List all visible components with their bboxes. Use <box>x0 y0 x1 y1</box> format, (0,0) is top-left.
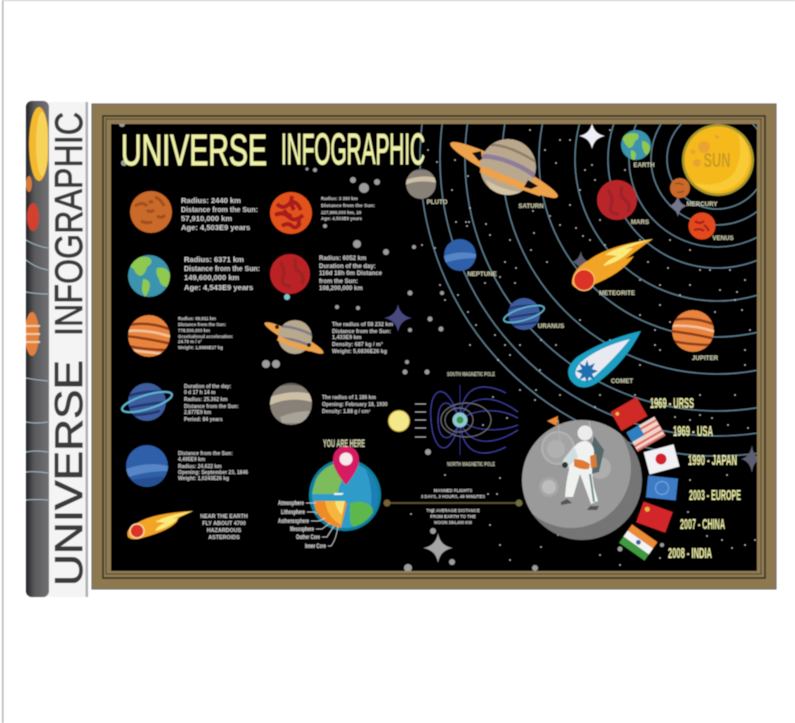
distance connector <box>384 500 522 506</box>
text: manned flights: MOON 384,400 KM <box>434 520 472 525</box>
flag: ussr <box>611 397 647 431</box>
earth layer labels: Inner Core <box>305 544 326 550</box>
text: uranus facts: 0 d 17 h 14 m <box>184 390 216 396</box>
sun <box>682 124 754 196</box>
timeline labels: 1969 - URSS <box>650 395 694 412</box>
text: uranus facts: Period: 84 years <box>184 417 223 423</box>
orbit planet labels: METEORITE <box>599 290 635 297</box>
earth layer labels: Mesosphere <box>290 527 314 533</box>
sun and magnetosphere <box>388 385 518 455</box>
orbit planet labels: JUPITER <box>692 355 719 362</box>
orbit planet: mercury <box>670 178 690 198</box>
text: uranus facts: 2,877E9 km <box>184 410 212 416</box>
earth layer labels: Asthenosphere <box>278 519 309 525</box>
orbit planet labels: MARS <box>631 219 649 226</box>
text: manned flights: FROM EARTH TO THE <box>430 514 476 519</box>
moon <box>521 419 643 541</box>
location pin <box>333 446 359 485</box>
text: saturn facts: Distance from the Sun: <box>332 329 391 335</box>
text: asteroids note: ASTEROIDS <box>208 535 240 541</box>
text: venus facts <box>319 256 383 292</box>
orbits <box>418 123 758 458</box>
planet: neptune <box>126 445 168 487</box>
earth cutaway <box>309 459 381 536</box>
text: asteroids note: NEAR THE EARTH <box>200 514 248 520</box>
text: saturn facts <box>332 322 393 355</box>
title <box>122 132 426 167</box>
text: mercury facts: Radius: 2440 km <box>181 196 241 205</box>
text: neptune facts: Opening: September 23, 1846 <box>178 470 248 476</box>
text: earth facts: 149,600,000 km <box>184 273 240 282</box>
text: mars facts: Age: 4,503E9 years <box>321 216 363 221</box>
text: jupiter facts: Weight: 1,8986E27 kg <box>178 345 223 350</box>
flag: india <box>619 524 657 561</box>
text: venus facts: 108,200,000 km <box>319 286 363 292</box>
planet: pluto <box>270 381 312 425</box>
text: venus facts: 116d 18h 0m Distance <box>319 271 383 277</box>
planet: mercury <box>130 191 172 233</box>
poster content: INFOGRAPHIC <box>281 125 425 174</box>
text: saturn facts: Weight: 5,6836E26 kg <box>332 349 387 355</box>
sun: SUN <box>704 150 730 172</box>
text: earth facts <box>184 255 260 292</box>
poster tube: UNIVERSE <box>48 360 91 586</box>
text: uranus facts: Radius: 25,362 km <box>184 397 228 403</box>
poster tube: INFOGRAPHIC <box>48 112 91 336</box>
text: asteroids note: FLY ABOUT 4700 <box>202 521 246 527</box>
star field <box>119 121 755 572</box>
four point stars <box>384 123 762 563</box>
orbit planet labels <box>427 162 734 385</box>
planet: earth <box>128 255 171 297</box>
text: asteroids note: HAZARDOUS <box>207 528 242 534</box>
large meteor <box>572 239 653 290</box>
flags <box>611 397 680 561</box>
orbit planet labels: URANUS <box>538 323 564 330</box>
meteor: lower left <box>127 511 193 539</box>
orbit planet: venus <box>688 212 716 240</box>
orbit planet labels: PLUTO <box>427 199 448 206</box>
text: saturn facts: The radius of 58 232 km <box>332 322 393 328</box>
text: mars facts: Distance from the Sun: <box>321 203 376 208</box>
text: mercury facts: 57,910,000 km <box>181 214 232 223</box>
text: earth facts: Age: 4,543E9 years <box>184 283 253 292</box>
text: uranus facts <box>184 384 239 423</box>
earth layer labels: Outher Core <box>296 535 320 541</box>
text: pluto facts <box>322 395 388 415</box>
text: mercury facts: Age: 4,503E9 years <box>181 223 250 232</box>
text: neptune facts <box>178 451 248 482</box>
text: jupiter facts: Gravitational acceleration: <box>178 334 234 339</box>
text: jupiter facts: Distance from the Sun: <box>178 322 227 327</box>
text: jupiter facts: 24.79 m / s² <box>178 339 202 344</box>
text: venus facts: Radius: 6052 km <box>319 256 366 262</box>
text: mercury facts <box>181 196 258 232</box>
you are here label: YOU ARE HERE <box>323 438 365 450</box>
timeline labels <box>650 395 741 562</box>
text: pluto facts: Density: 1.88 g / cm³ <box>322 409 371 415</box>
orbit planet: pluto <box>405 168 437 199</box>
text: pluto facts: The radius of 1 186 km <box>322 395 376 401</box>
text: manned flights: 3 DAYS, 3 HOURS, 49 MINUTES <box>421 494 485 499</box>
flag: china <box>636 502 673 533</box>
text: mars facts <box>321 196 376 221</box>
orbit planet labels: NEPTUNE <box>467 271 497 278</box>
poster tube <box>25 101 91 597</box>
text: asteroids note <box>200 514 248 541</box>
moon flag <box>546 415 560 431</box>
text: venus facts: from the Sun: <box>319 279 358 285</box>
orbit planet: mars <box>597 180 637 220</box>
text: neptune facts: Weight: 1,0243E26 kg <box>178 476 229 482</box>
text: earth facts: Radius: 6371 km <box>184 255 244 264</box>
text: earth facts: Distance from the Sun: <box>184 264 260 273</box>
timeline labels: 2008 - INDIA <box>668 545 712 562</box>
earth layer labels <box>278 501 338 550</box>
planet: saturn small <box>264 319 324 355</box>
astronaut <box>561 421 604 510</box>
text: manned flights <box>421 488 485 525</box>
poster content <box>118 123 758 572</box>
timeline labels: 2007 - CHINA <box>680 516 725 533</box>
flag: japan <box>644 444 680 474</box>
text: jupiter facts: 778,500,000 km <box>178 328 210 333</box>
planet: venus <box>270 254 310 294</box>
comet <box>568 331 641 388</box>
text: mars facts: 227,900,000 km, 10 <box>321 210 362 215</box>
magnetic pole labels: NORTH MAGNETIC POLE <box>447 462 496 468</box>
text: mercury facts: Distance from the Sun: <box>181 205 258 214</box>
text: neptune facts: 4,495E9 km <box>178 457 206 463</box>
magnetic pole labels: SOUTH MAGNETIC POLE <box>447 372 496 378</box>
text: venus facts: Duration of the day: <box>319 264 376 270</box>
earth layer labels: Lithosphere <box>281 510 305 516</box>
orbit planet: neptune <box>444 239 476 271</box>
planet: mars style <box>270 192 312 234</box>
text: uranus facts: Distance from the Sun: <box>184 404 239 410</box>
text: mars facts: Radius: 3 390 km <box>321 196 358 201</box>
earth layer labels: Atmosphere <box>278 501 304 507</box>
planet: jupiter <box>126 315 172 357</box>
text: uranus facts: Duration of the day: <box>184 384 232 390</box>
planet: uranus <box>120 383 174 421</box>
text: saturn facts: Density: 687 kg / m³ <box>332 342 383 348</box>
magnetic pole labels <box>447 372 496 468</box>
poster frame <box>92 104 776 589</box>
text: jupiter facts: Radius: 69,911 km <box>178 316 216 321</box>
timeline labels: 1990 - JAPAN <box>688 452 737 469</box>
text: neptune facts: Distance from the Sun: <box>178 451 233 457</box>
text: pluto facts: Opening: February 18, 1930 <box>322 402 388 408</box>
orbit planet labels: VENUS <box>712 235 734 242</box>
title: UNIVERSE <box>121 126 267 175</box>
text: manned flights: MANNED FLIGHTS <box>434 488 472 493</box>
text: jupiter facts <box>178 316 234 350</box>
orbit planet labels: COMET <box>611 378 633 385</box>
orbit planet: uranus <box>502 298 546 330</box>
flag: europe <box>646 475 678 501</box>
flag: usa <box>627 416 665 452</box>
text: saturn facts: 1,433E9 km <box>332 335 362 341</box>
orbit planet labels: EARTH <box>633 162 655 169</box>
orbit planet labels: SATURN <box>518 203 544 210</box>
orbit planet labels: MERCURY <box>686 201 718 208</box>
orbit planet: saturn <box>446 135 562 205</box>
timeline labels: 1969 - USA <box>673 423 713 440</box>
orbit planet: jupiter <box>670 310 716 352</box>
text: neptune facts: Radius: 24,622 km <box>178 464 222 470</box>
orbit planet: earth <box>621 130 651 162</box>
text: manned flights: THE AVERAGE DISTANCE <box>426 508 480 513</box>
